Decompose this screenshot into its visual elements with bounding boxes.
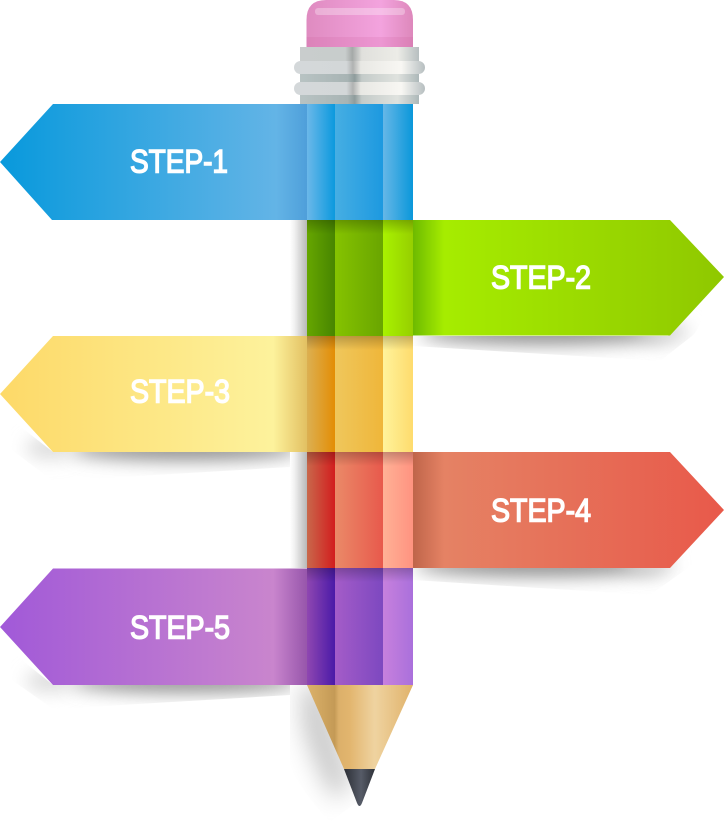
label: step 3: STEP-3 bbox=[130, 374, 230, 410]
arrow: step 1 bbox=[0, 104, 307, 220]
shadow under step 3 arrow bbox=[26, 438, 300, 460]
pencil body: green section bbox=[307, 220, 413, 336]
pencil eraser bbox=[306, 0, 413, 47]
arrow: step 3 bbox=[0, 336, 307, 452]
shadow beside the pencil tip bbox=[302, 685, 350, 800]
pencil body: red section bbox=[307, 452, 413, 568]
pencil ferrule bbox=[294, 47, 425, 104]
pencil bbox=[294, 0, 425, 806]
pencil body: yellow section bbox=[307, 336, 413, 452]
label: step 1: STEP-1 bbox=[130, 144, 228, 180]
arrow: step 4 bbox=[413, 452, 724, 568]
shadow under step 5 arrow bbox=[26, 671, 300, 692]
pencil wood tip bbox=[307, 685, 413, 769]
label: step 4: STEP-4 bbox=[491, 492, 591, 528]
shadow under step 4 arrow bbox=[415, 554, 674, 576]
shadow under step 2 arrow bbox=[420, 322, 689, 344]
pencil body: purple section bbox=[307, 568, 413, 685]
shadows beside the pencil bbox=[290, 220, 307, 568]
pencil lead bbox=[344, 769, 375, 806]
arrow: step 5 bbox=[0, 568, 307, 685]
pencil body: blue section bbox=[307, 104, 413, 220]
label: step 2: STEP-2 bbox=[491, 260, 591, 296]
label: step 5: STEP-5 bbox=[130, 610, 230, 646]
arrow: step 2 bbox=[413, 220, 724, 336]
